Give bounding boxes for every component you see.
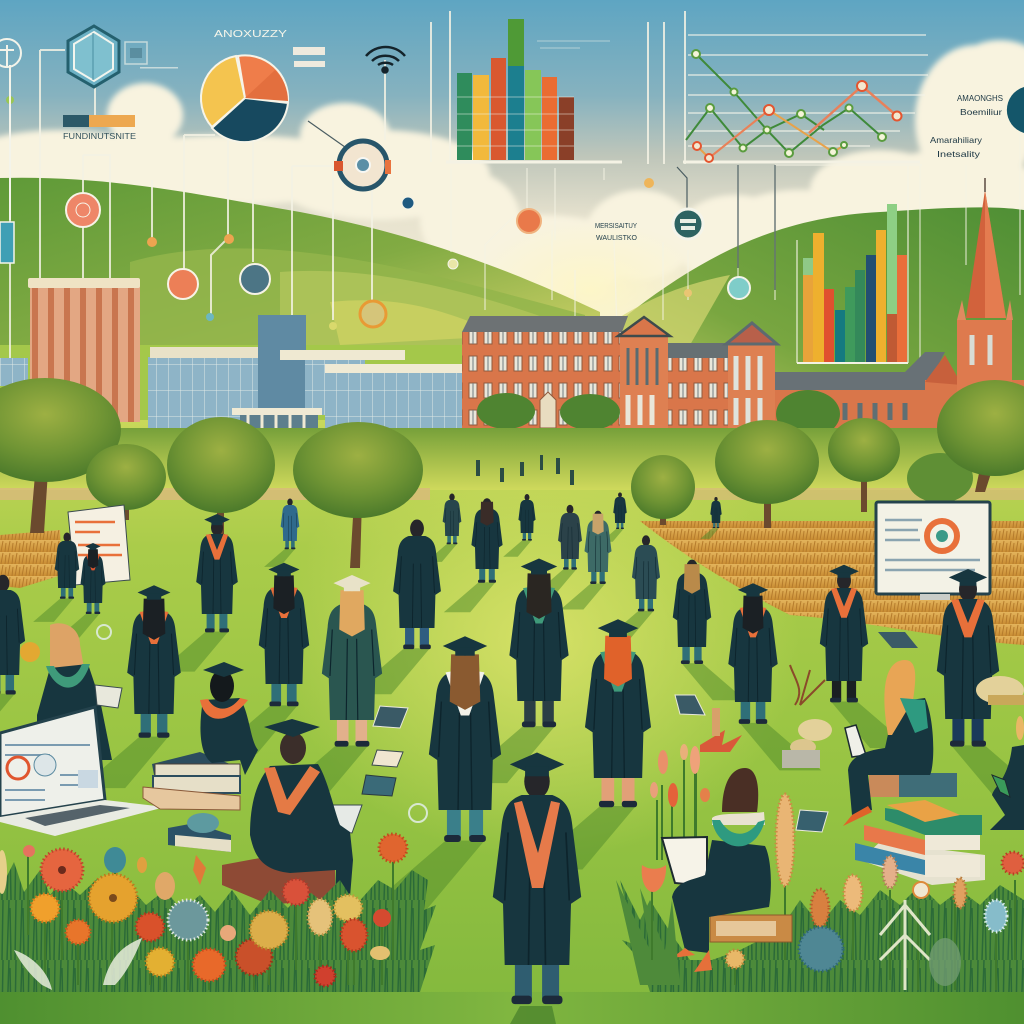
tulip near seated graduate: [642, 865, 666, 960]
icon: tree emblem: [0, 39, 21, 220]
scattered tablets and plants: [20, 625, 1024, 832]
graduates: standing front row: [365, 619, 651, 1004]
hedge bushes: [477, 390, 840, 438]
right side text labels: Boemiliur: [960, 107, 1002, 117]
seated graduate on books: [200, 662, 258, 775]
book and plant small: [168, 813, 231, 852]
line chart: top right: [648, 11, 928, 164]
graduates: standing middle row: [0, 513, 1024, 805]
circle icons along connector lines: [6, 96, 750, 330]
building: columned tower: [0, 278, 140, 422]
seated graduate: blonde left: [37, 623, 122, 760]
flowers right: [726, 794, 1024, 990]
icon: hexagon badge: [68, 26, 119, 87]
book stack left: [143, 752, 240, 810]
bar label and caption: FUNDINUTSNITE: [63, 131, 136, 141]
mini legend: [293, 47, 325, 67]
building: modern glass hall: [148, 315, 478, 445]
right side text labels: AMAONGHS: [957, 93, 1003, 103]
grass fan near tulip: [616, 880, 680, 985]
seated graduate: right edge: [990, 716, 1024, 830]
stole detail on central graduate: [514, 801, 560, 888]
tall tulip group: [650, 744, 710, 860]
building: church spire: [957, 178, 1013, 395]
icon: wifi: [366, 47, 405, 72]
seated graduate with laptop: front left: [222, 719, 362, 905]
seated graduate: brown hair with laptop: [662, 768, 792, 972]
icon: blue tile: [0, 222, 14, 263]
centre text label: MERSISAITUY: [595, 221, 637, 230]
monitor display right: [876, 502, 990, 600]
right side text labels: Amarahiliary: [930, 135, 983, 145]
central graduate shadow on strip: [510, 1006, 556, 1024]
title label: ANOXUZZY: [214, 29, 287, 40]
flowers left: [0, 834, 407, 990]
leaf fern left: [14, 938, 142, 990]
building: brick university: [462, 316, 1024, 432]
mid lawn band: [0, 428, 1024, 490]
right side text labels: [930, 93, 1003, 159]
graduates: distant crowd: [33, 455, 722, 638]
colourful book stack right: [855, 800, 985, 885]
sky background: [0, 0, 1024, 340]
bar label and caption: [63, 115, 136, 141]
connector lines: [10, 50, 1020, 380]
laptop left: [0, 707, 165, 836]
bar chart: on hill: [797, 165, 908, 363]
centre text label: [595, 221, 637, 242]
bar chart: top centre: [431, 11, 622, 162]
bottom grass strip: [0, 992, 1024, 1024]
icon: partial teal circle right edge: [1007, 87, 1024, 133]
trees: [0, 378, 1024, 568]
grass band right: [620, 880, 1024, 992]
pie chart: [201, 55, 288, 142]
centre text label: WAULISTKO: [596, 233, 637, 242]
rolling green hills: [0, 178, 1024, 420]
presentation sign left: [68, 505, 130, 585]
clouds: [0, 40, 1024, 295]
wheat fields: [0, 521, 1024, 645]
small tech emblem and caption: [125, 42, 178, 68]
seated graduate: blonde right: [843, 660, 957, 826]
grass band left: [0, 862, 436, 992]
icon: ring gauge: [334, 141, 391, 189]
lawn: [0, 420, 1024, 1000]
right side text labels: Inetsality: [937, 149, 981, 159]
